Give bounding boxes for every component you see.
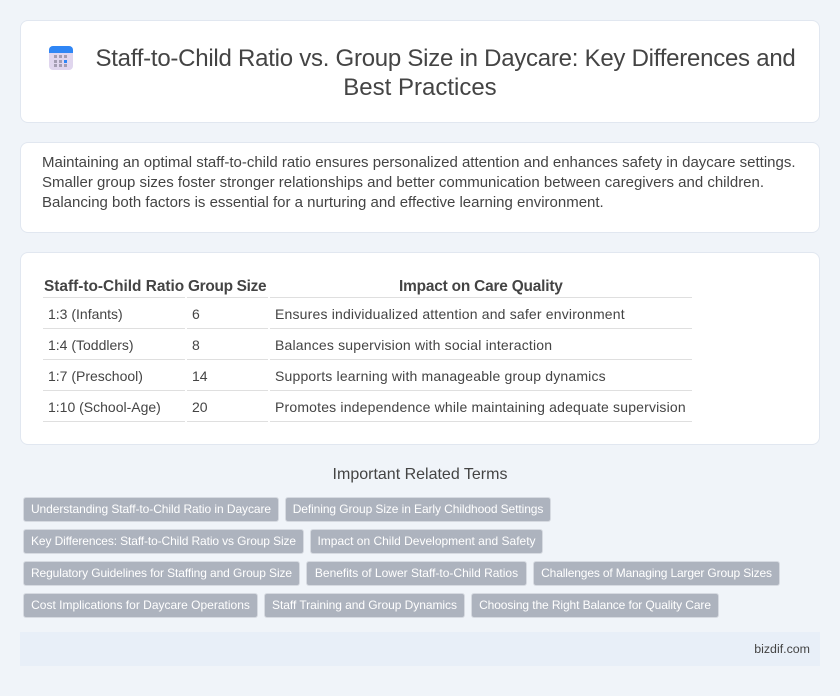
table: 1:3 (Infants) [48,306,123,322]
panel: header [20,20,820,123]
icon: calendar [49,46,73,70]
footer text: bizdif.com [754,642,810,656]
tag list: Impact on Child Development and Safety [317,534,536,548]
panel: intro [20,142,820,233]
footer bar [20,632,820,666]
title [95,45,796,101]
tag list: Cost Implications for Daycare Operations [31,598,250,612]
tag list: Choosing the Right Balance for Quality Care [479,598,711,612]
text block: intro: Balancing both factors is essential for a nurturing and effective learning environment. [42,194,604,211]
table: 1:4 (Toddlers) [48,337,134,353]
tag list: Defining Group Size in Early Childhood Settings [293,502,543,516]
table header [44,278,563,295]
table: Impact on Care Quality [399,278,563,295]
title: Staff-to-Child Ratio vs. Group Size in Daycare: Key Differences and [95,45,796,72]
table: 6 [192,306,200,322]
table: 1:7 (Preschool) [48,368,143,384]
table: 8 [192,337,200,353]
text block: intro [42,154,796,211]
table: 14 [192,368,208,384]
title: Best Practices [343,74,497,101]
tag list [23,497,780,618]
text block: intro: Maintaining an optimal staff-to-child ratio ensures personalized attention and enhances safety in daycare settings. [42,154,796,171]
table: Promotes independence while maintaining adequate supervision [275,399,686,415]
table: 1:10 (School-Age) [48,399,161,415]
table: Ensures individualized attention and safer environment [275,306,625,322]
tag list: Staff Training and Group Dynamics [272,598,457,612]
table [43,278,692,422]
table: Group Size [188,278,266,295]
table: Supports learning with manageable group dynamics [275,368,606,384]
table: 20 [192,399,208,415]
text block: intro: Smaller group sizes foster stronger relationships and better communication between caregivers and children. [42,174,764,191]
tag list: Challenges of Managing Larger Group Sizes [541,566,772,580]
table: Balances supervision with social interaction [275,337,552,353]
tag list: Regulatory Guidelines for Staffing and Group Size [31,566,292,580]
tag list: Understanding Staff-to-Child Ratio in Daycare [31,502,271,516]
tag list: Benefits of Lower Staff-to-Child Ratios [315,566,518,580]
table: Staff-to-Child Ratio [44,278,184,295]
panel: table [20,252,820,445]
heading: related terms: Important Related Terms [333,466,507,483]
tag list: Key Differences: Staff-to-Child Ratio vs Group Size [31,534,296,548]
